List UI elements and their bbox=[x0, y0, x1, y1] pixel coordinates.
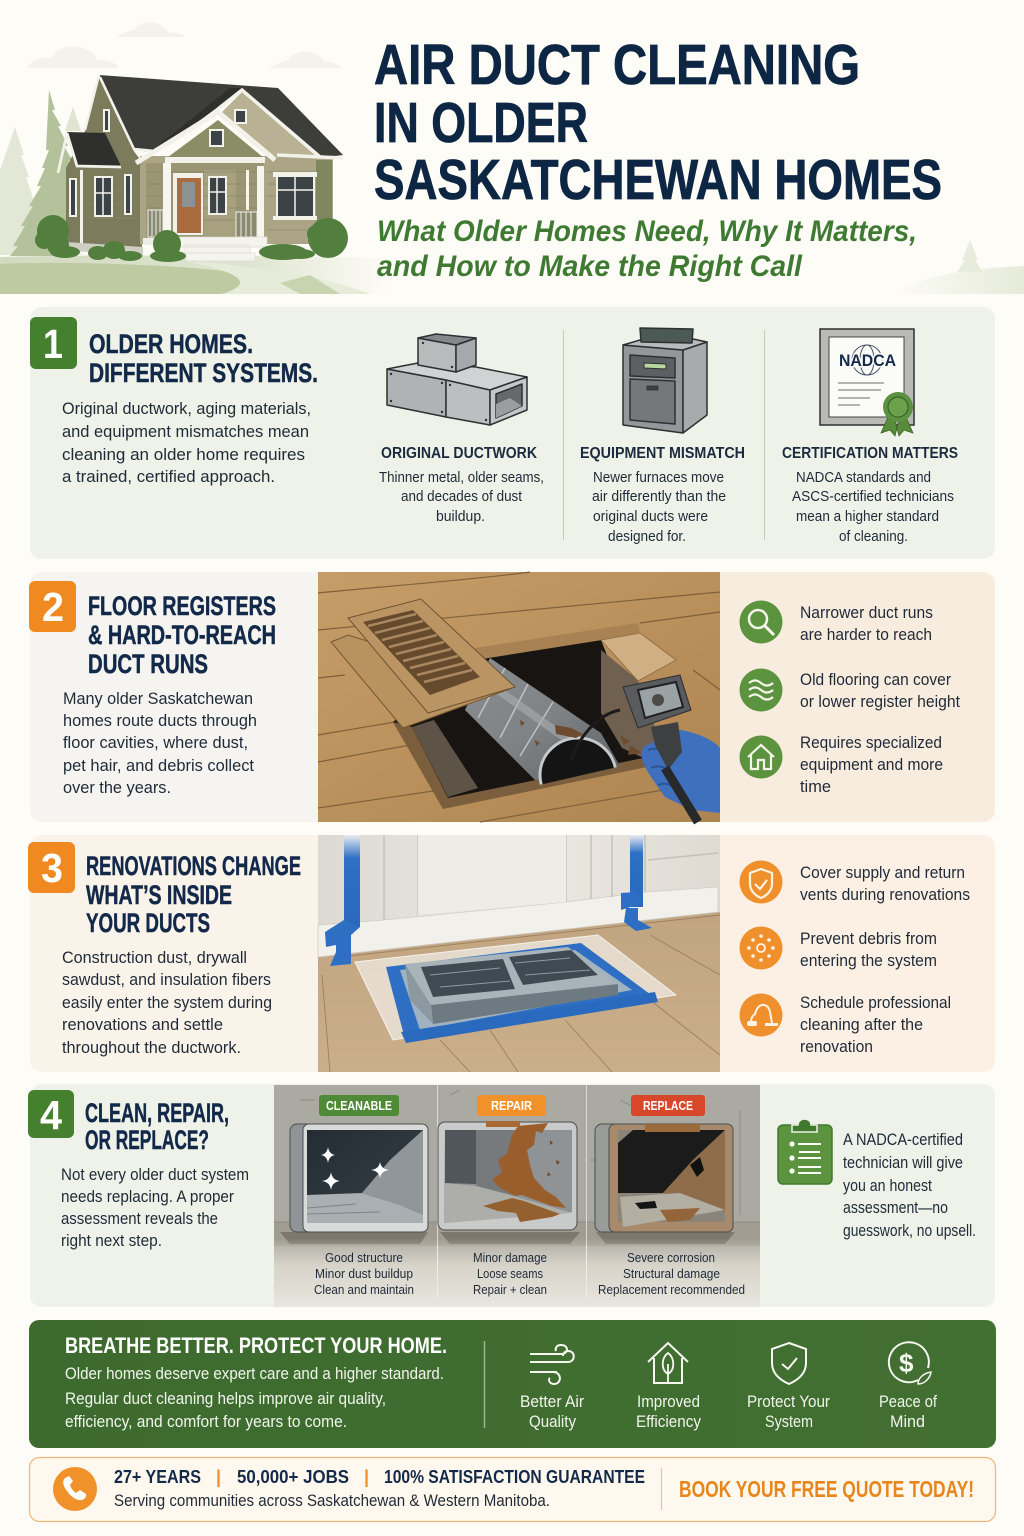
plastic sheet bbox=[355, 935, 676, 1040]
benefit: peace of mind: Peace of bbox=[879, 1392, 937, 1411]
caption: replace bbox=[598, 1251, 745, 1297]
floor opening bbox=[393, 640, 648, 807]
banner body text: efficiency, and comfort for years to come. bbox=[65, 1412, 347, 1431]
benefit: improved efficiency: Efficiency bbox=[636, 1412, 701, 1431]
benefit: specialized equipment: Requires specialized bbox=[800, 733, 942, 752]
section 3 body text: easily enter the system during bbox=[62, 993, 272, 1012]
section 3 heading: YOUR DUCTS bbox=[86, 908, 210, 938]
blue tape frame bbox=[386, 943, 658, 1043]
icon: furnace bbox=[623, 328, 707, 433]
benefit: specialized equipment: equipment and more bbox=[800, 755, 943, 774]
callout: honest assessment: you an honest bbox=[843, 1176, 932, 1195]
section 2 heading: DUCT RUNS bbox=[88, 649, 208, 679]
section 2 body text: over the years. bbox=[63, 778, 171, 797]
removed register cover bbox=[331, 635, 515, 728]
title bbox=[374, 33, 942, 212]
section 2 body text: floor cavities, where dust, bbox=[63, 733, 248, 752]
blue tape strips bbox=[344, 835, 360, 927]
column: certification matters: ASCS-certified technicians bbox=[792, 489, 954, 505]
benefit: old flooring: or lower register height bbox=[800, 692, 960, 711]
column: certification matters: of cleaning. bbox=[839, 529, 908, 545]
icon: NADCA certificate bbox=[820, 329, 914, 436]
credentials line bbox=[114, 1467, 645, 1487]
green banner: breathe better bbox=[29, 1320, 996, 1448]
section 2 heading: FLOOR REGISTERS bbox=[88, 591, 276, 621]
main body wall bbox=[140, 156, 333, 244]
column: original ductwork: Thinner metal, older seams, bbox=[379, 470, 544, 486]
callout: honest assessment: guesswork, no upsell. bbox=[843, 1221, 976, 1240]
section 2 body text: Many older Saskatchewan bbox=[63, 689, 253, 708]
icon: phone bbox=[53, 1467, 97, 1511]
benefit: prevent debris bbox=[740, 926, 937, 970]
number badge 4 bbox=[28, 1090, 74, 1138]
benefit: narrower runs: are harder to reach bbox=[800, 625, 932, 644]
label: repair bbox=[477, 1095, 546, 1116]
column: equipment mismatch: designed for. bbox=[608, 529, 686, 545]
banner heading: BREATHE BETTER. PROTECT YOUR HOME. bbox=[65, 1333, 447, 1358]
benefit: cover vents: Cover supply and return bbox=[800, 863, 965, 882]
caption: repair bbox=[473, 1251, 547, 1297]
number badge 2: 2 bbox=[42, 584, 64, 630]
section 1 body text: Original ductwork, aging materials, bbox=[62, 399, 311, 418]
section 4 heading: OR REPLACE? bbox=[85, 1125, 209, 1155]
benefit: protect your system: System bbox=[765, 1412, 813, 1431]
credentials line: 100% SATISFACTION GUARANTEE bbox=[384, 1467, 645, 1487]
credentials line: 50,000+ JOBS bbox=[237, 1467, 349, 1487]
label: replace bbox=[631, 1095, 705, 1116]
label: cleanable bbox=[319, 1095, 399, 1116]
benefit: better air quality: Better Air bbox=[520, 1392, 584, 1411]
column: original ductwork bbox=[379, 445, 544, 525]
right hill and tree bbox=[890, 266, 1024, 294]
column: original ductwork: buildup. bbox=[436, 509, 485, 525]
panel 4: clean, repair, or replace bbox=[28, 1084, 995, 1307]
benefit: peace of mind bbox=[879, 1342, 937, 1431]
benefit: peace of mind: Mind bbox=[890, 1412, 925, 1431]
section 3 body text: renovations and settle bbox=[62, 1015, 223, 1034]
column: equipment mismatch: EQUIPMENT MISMATCH bbox=[580, 445, 745, 462]
benefit: narrower runs: Narrower duct runs bbox=[800, 603, 933, 622]
inspection camera and gloved hand bbox=[571, 710, 620, 760]
callout: honest assessment: technician will give bbox=[843, 1153, 963, 1172]
benefit: peace of mind: $ bbox=[899, 1348, 914, 1378]
banner body text bbox=[65, 1364, 444, 1431]
section 1 body text bbox=[62, 399, 311, 486]
caption: cleanable bbox=[314, 1251, 414, 1297]
subtitle: What Older Homes Need, Why It Matters, bbox=[377, 215, 917, 248]
back gable bbox=[222, 92, 316, 156]
benefit: improved efficiency bbox=[636, 1343, 701, 1431]
comparison image: three duct conditions bbox=[274, 1085, 760, 1307]
benefit: improved efficiency: Improved bbox=[637, 1392, 700, 1411]
ground and path bbox=[0, 255, 390, 294]
number badge 4: 4 bbox=[40, 1092, 62, 1138]
caption: cleanable: Good structure bbox=[325, 1251, 403, 1265]
foundation and steps bbox=[66, 242, 143, 257]
icon: clipboard checklist bbox=[778, 1119, 832, 1184]
panel 2: floor registers and hard-to-reach duct runs bbox=[29, 572, 995, 822]
porch posts and rails bbox=[163, 163, 264, 237]
benefit: old flooring: Old flooring can cover bbox=[800, 670, 951, 689]
label: repair: REPAIR bbox=[491, 1098, 533, 1113]
benefit: old flooring bbox=[740, 668, 960, 712]
column: equipment mismatch: air differently than the bbox=[592, 489, 726, 505]
column: equipment mismatch: Newer furnaces move bbox=[593, 470, 724, 486]
benefit: schedule cleaning: renovation bbox=[800, 1037, 873, 1056]
footer bar: credentials and call to action bbox=[30, 1458, 996, 1522]
door bbox=[173, 173, 203, 235]
section 1 heading: DIFFERENT SYSTEMS. bbox=[89, 358, 318, 388]
caption: cleanable: Clean and maintain bbox=[314, 1283, 414, 1297]
benefit: narrower runs bbox=[740, 600, 933, 644]
benefit: protect your system: Protect Your bbox=[747, 1392, 830, 1411]
section 3 body text: Construction dust, drywall bbox=[62, 948, 247, 967]
number badge 2 bbox=[29, 581, 76, 632]
section 4 body text bbox=[61, 1165, 249, 1250]
section 1 body text: and equipment mismatches mean bbox=[62, 422, 309, 441]
subtitle bbox=[377, 215, 917, 283]
repair duct bbox=[438, 1121, 577, 1230]
icon: original ductwork bbox=[387, 334, 527, 425]
number badge 3 bbox=[28, 842, 75, 893]
panel 1: older homes, different systems bbox=[30, 307, 995, 559]
section 4 body text: Not every older duct system bbox=[61, 1165, 249, 1184]
number badge 3: 3 bbox=[41, 845, 63, 891]
benefit: prevent debris: Prevent debris from bbox=[800, 929, 937, 948]
caption: repair: Minor damage bbox=[473, 1251, 547, 1265]
credentials line: 27+ YEARS bbox=[114, 1467, 201, 1487]
benefit: specialized equipment bbox=[740, 733, 943, 796]
section 1 heading: OLDER HOMES. bbox=[89, 329, 253, 359]
benefit: protect your system bbox=[747, 1343, 830, 1431]
section 3 heading: WHAT’S INSIDE bbox=[86, 880, 232, 910]
main roof bbox=[99, 75, 343, 158]
credentials line: | bbox=[364, 1467, 369, 1487]
caption: replace: Severe corrosion bbox=[627, 1251, 715, 1265]
section 3 heading bbox=[86, 851, 301, 938]
number badge 1: 1 bbox=[43, 321, 63, 367]
section 4 body text: needs replacing. A proper bbox=[61, 1187, 234, 1206]
title: IN OLDER bbox=[374, 91, 588, 155]
subtitle: and How to Make the Right Call bbox=[377, 250, 803, 283]
callout: honest assessment bbox=[843, 1130, 976, 1240]
illustration: open floor register with duct and inspection camera bbox=[318, 572, 720, 822]
callout: honest assessment: A NADCA-certified bbox=[843, 1130, 963, 1149]
background clouds bbox=[27, 22, 342, 68]
benefit: cover vents bbox=[740, 860, 970, 904]
section 2 body text bbox=[63, 689, 257, 797]
section 2 body text: pet hair, and debris collect bbox=[63, 756, 254, 775]
front gable bbox=[168, 120, 264, 158]
section 1 body text: cleaning an older home requires bbox=[62, 445, 305, 464]
icon: NADCA certificate: NADCA bbox=[839, 351, 896, 370]
caption: repair: Repair + clean bbox=[473, 1283, 547, 1297]
label: cleanable: CLEANABLE bbox=[326, 1098, 392, 1113]
column: equipment mismatch bbox=[580, 445, 745, 545]
covered vent bbox=[405, 947, 618, 1005]
caption: repair: Loose seams bbox=[477, 1267, 543, 1281]
section 4 body text: right next step. bbox=[61, 1231, 162, 1250]
label: replace: REPLACE bbox=[643, 1098, 693, 1113]
section 3 heading: RENOVATIONS CHANGE bbox=[86, 851, 301, 881]
caption: replace: Structural damage bbox=[623, 1267, 720, 1281]
callout: honest assessment: assessment—no bbox=[843, 1198, 948, 1217]
porch recess bbox=[146, 163, 264, 238]
benefit: prevent debris: entering the system bbox=[800, 951, 937, 970]
column: original ductwork: and decades of dust bbox=[401, 489, 522, 505]
title: AIR DUCT CLEANING bbox=[374, 33, 860, 97]
benefit: better air quality: Quality bbox=[529, 1412, 576, 1431]
service area text: Serving communities across Saskatchewan & Western Manitoba. bbox=[114, 1491, 550, 1510]
section 3 body text: sawdust, and insulation fibers bbox=[62, 970, 271, 989]
section 4 heading bbox=[85, 1098, 229, 1155]
header illustration: house and landscape bbox=[0, 22, 1024, 294]
column: certification matters: CERTIFICATION MATTERS bbox=[782, 445, 958, 462]
section 2 heading bbox=[88, 591, 276, 679]
windows bbox=[70, 110, 314, 217]
column: certification matters bbox=[782, 445, 958, 545]
benefit: schedule cleaning bbox=[740, 993, 951, 1056]
benefit: cover vents: vents during renovations bbox=[800, 885, 970, 904]
duct pipe bbox=[465, 658, 620, 785]
side gable wing roof bbox=[67, 132, 121, 166]
section 4 body text: assessment reveals the bbox=[61, 1209, 218, 1228]
section 3 body text bbox=[62, 948, 272, 1057]
section 4 heading: CLEAN, REPAIR, bbox=[85, 1098, 229, 1128]
replace duct bbox=[595, 1124, 733, 1232]
benefit: specialized equipment: time bbox=[800, 777, 831, 796]
column: certification matters: NADCA standards and bbox=[796, 470, 931, 486]
shrubs bbox=[35, 215, 348, 262]
column: certification matters: mean a higher standard bbox=[796, 509, 939, 525]
benefit: schedule cleaning: cleaning after the bbox=[800, 1015, 923, 1034]
section 1 body text: a trained, certified approach. bbox=[62, 467, 275, 486]
banner body text: Older homes deserve expert care and a higher standard. bbox=[65, 1364, 444, 1383]
pine trees bbox=[0, 90, 81, 256]
caption: cleanable: Minor dust buildup bbox=[315, 1267, 413, 1281]
number badge 1 bbox=[30, 317, 77, 369]
section 2 body text: homes route ducts through bbox=[63, 711, 257, 730]
benefit: schedule cleaning: Schedule professional bbox=[800, 993, 951, 1012]
column: original ductwork: ORIGINAL DUCTWORK bbox=[381, 445, 537, 462]
credentials line: | bbox=[216, 1467, 221, 1487]
column: equipment mismatch: original ducts were bbox=[593, 509, 708, 525]
illustration: vent sealed with plastic and blue tape bbox=[318, 835, 720, 1072]
section 3 body text: throughout the ductwork. bbox=[62, 1038, 241, 1057]
cleanable duct bbox=[290, 1124, 428, 1232]
left gable and wing walls bbox=[66, 78, 142, 256]
section 2 heading: & HARD-TO-REACH bbox=[88, 620, 276, 650]
banner body text: Regular duct cleaning helps improve air quality, bbox=[65, 1389, 386, 1408]
panel 3: renovations change what's inside your ducts bbox=[28, 835, 995, 1072]
section 1 heading bbox=[89, 329, 318, 388]
house bbox=[58, 75, 343, 261]
caption: replace: Replacement recommended bbox=[598, 1283, 745, 1297]
benefit: better air quality bbox=[520, 1345, 584, 1431]
